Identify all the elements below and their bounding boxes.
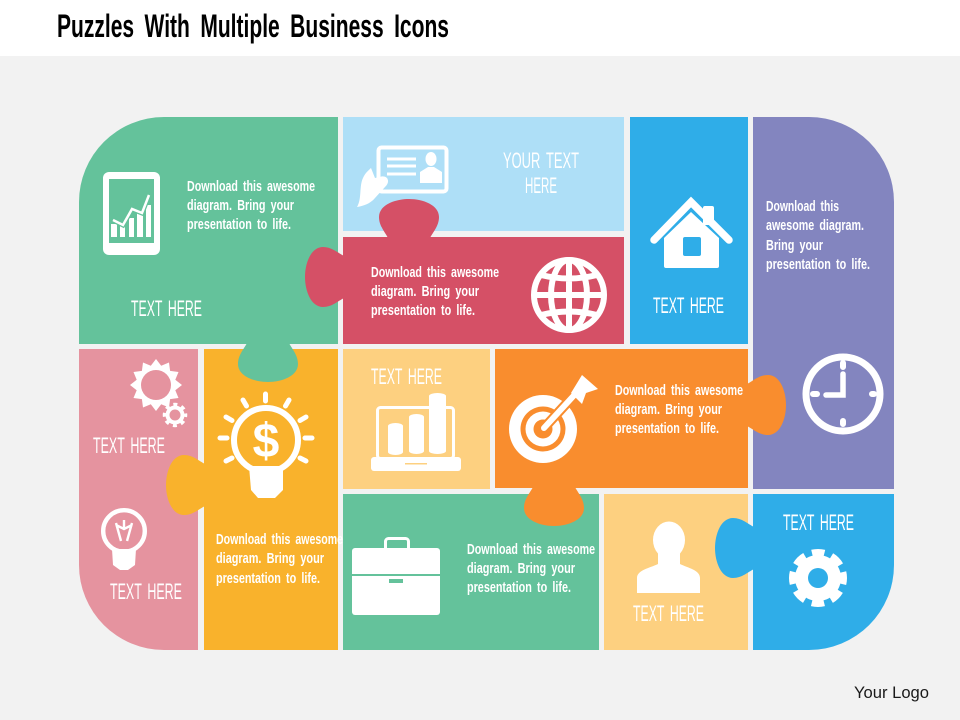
icon: briefcase xyxy=(352,538,440,615)
text block: orange description xyxy=(615,382,743,437)
label: text here: TEXT HERE xyxy=(371,364,442,389)
icon: small gear xyxy=(164,404,186,426)
panel: light blue card xyxy=(343,117,624,231)
text block: purple description: Download this xyxy=(766,198,839,215)
green bottom panel shape xyxy=(343,494,599,650)
icon: globe xyxy=(533,259,605,331)
panel: blue house xyxy=(630,117,748,344)
text block: purple description: presentation to life. xyxy=(766,256,870,273)
label: text here: TEXT HERE xyxy=(110,579,182,604)
icon: hand holding profile card xyxy=(357,148,446,207)
purple panel shape xyxy=(753,117,894,489)
panel: green briefcase xyxy=(343,494,599,650)
panel: red globe xyxy=(305,199,624,344)
red panel shape xyxy=(343,237,624,344)
label: your text here xyxy=(503,148,579,198)
text block: purple description: Bring your xyxy=(766,237,823,254)
panel: green tablet xyxy=(79,117,338,382)
panel: pink gears and bulb xyxy=(79,349,198,650)
puzzle knob: yellow left xyxy=(166,455,205,515)
text block: green description xyxy=(187,178,315,233)
text block: green bottom description: presentation to life. xyxy=(467,579,571,596)
green panel shape xyxy=(79,117,338,344)
puzzle knob: red top xyxy=(379,199,439,238)
panel: blue gear xyxy=(715,494,894,650)
icon: large gear xyxy=(130,359,182,411)
logo text: Your Logo xyxy=(854,683,929,702)
text block: yellow description: presentation to life. xyxy=(216,570,320,587)
icon: dollar bulb xyxy=(220,394,312,498)
text block: red description: presentation to life. xyxy=(371,302,475,319)
yellow panel shape xyxy=(204,349,338,650)
text block: green bottom description: Download this awesome xyxy=(467,541,595,558)
text block: orange description: diagram. Bring your xyxy=(615,401,722,418)
icon: laptop with cylinders xyxy=(371,393,461,471)
label: text here: TEXT HERE xyxy=(93,433,165,458)
label: text here: TEXT HERE xyxy=(131,296,202,321)
orange panel shape xyxy=(495,349,748,488)
text block: yellow description xyxy=(216,531,343,587)
text block: green description: diagram. Bring your xyxy=(187,197,294,214)
label: your text here: HERE xyxy=(525,173,557,198)
icon: target with arrow xyxy=(509,375,598,463)
icon: gear xyxy=(794,554,842,602)
icon: light bulb xyxy=(103,510,145,570)
text block: green bottom description xyxy=(467,541,595,596)
light orange bottom panel shape xyxy=(604,494,748,650)
text block: green bottom description: diagram. Bring your xyxy=(467,560,575,577)
panel: orange target xyxy=(495,349,786,526)
text block: yellow description: diagram. Bring your xyxy=(216,550,324,567)
icon: person xyxy=(637,522,700,593)
panel: light orange laptop chart xyxy=(343,349,490,489)
text block: purple description: awesome diagram. xyxy=(766,217,864,234)
blue bottom right panel shape xyxy=(753,494,894,650)
text block: red description: Download this awesome xyxy=(371,264,499,281)
panel: light orange person xyxy=(604,494,748,650)
text block: purple description xyxy=(766,198,870,273)
text block: red description: diagram. Bring your xyxy=(371,283,479,300)
panel: purple clock xyxy=(753,117,894,489)
icon: dollar bulb: $ xyxy=(253,415,280,468)
text block: yellow description: Download this awesome xyxy=(216,531,343,548)
light blue panel shape xyxy=(343,117,624,231)
label: your text here: YOUR TEXT xyxy=(503,148,579,173)
text block: orange description: presentation to life. xyxy=(615,420,719,437)
icon: house xyxy=(654,202,729,268)
label: text here: TEXT HERE xyxy=(633,601,704,626)
light orange panel shape xyxy=(343,349,490,489)
pink panel shape xyxy=(79,349,198,650)
label: text here: TEXT HERE xyxy=(653,293,724,318)
puzzle knob: orange right xyxy=(747,375,786,435)
panel: yellow idea xyxy=(166,349,343,650)
text block: green description: Download this awesome xyxy=(187,178,315,195)
text block: green description: presentation to life. xyxy=(187,216,291,233)
text block: red description xyxy=(371,264,499,319)
blue panel shape xyxy=(630,117,748,344)
puzzle knob: green down xyxy=(238,343,298,382)
label: text here: TEXT HERE xyxy=(783,510,854,535)
puzzle knob: orange bottom xyxy=(524,487,584,526)
title: Puzzles With Multiple Business Icons xyxy=(57,8,449,44)
icon: tablet chart xyxy=(103,172,160,255)
puzzle knob: red left xyxy=(305,247,344,307)
text block: orange description: Download this awesome xyxy=(615,382,743,399)
puzzle knob: blue left xyxy=(715,518,754,578)
icon: clock xyxy=(806,357,880,431)
